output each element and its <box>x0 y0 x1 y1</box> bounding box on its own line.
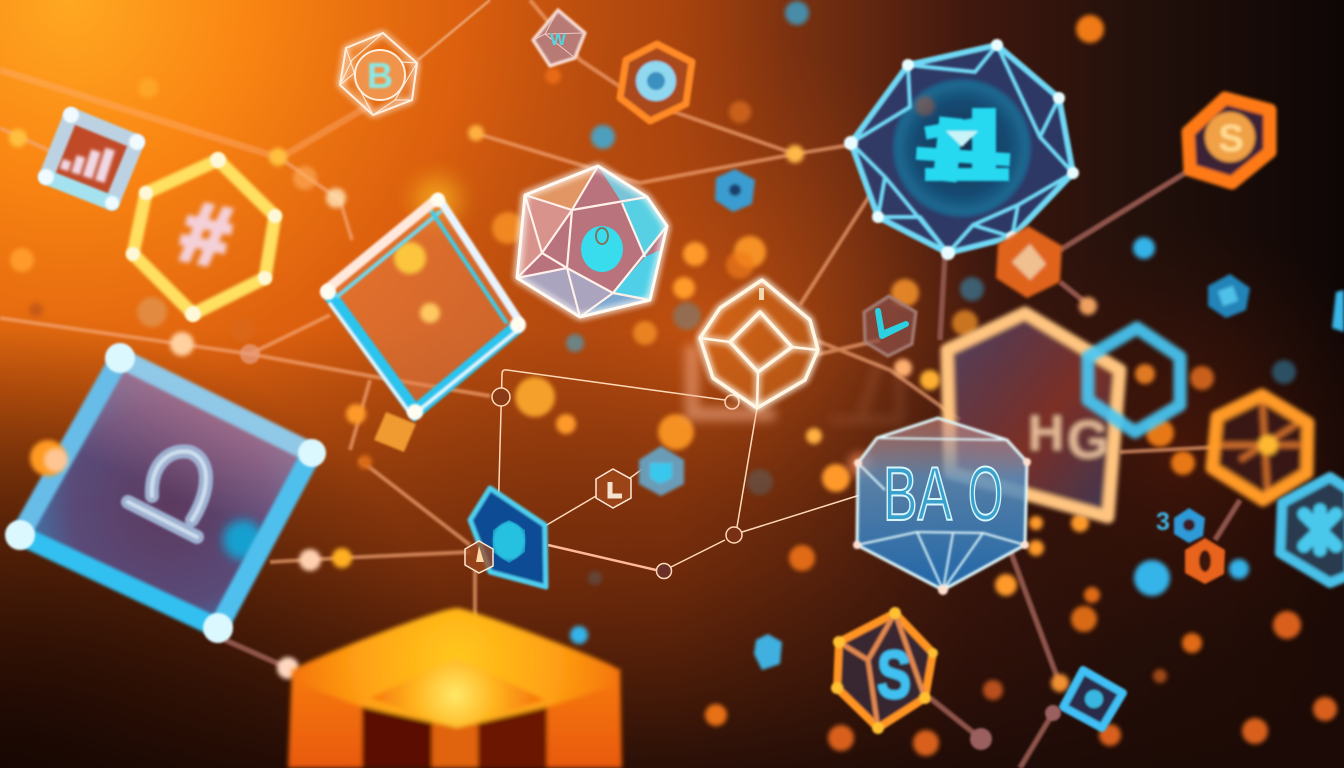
icon: orange hexagon coin <box>1188 98 1270 183</box>
icon: small blue hexagons <box>715 169 1344 670</box>
icon: faceted crystal <box>517 166 667 317</box>
icon: blurred orange tile <box>374 412 416 452</box>
icon: small orange hexagon <box>996 226 1062 298</box>
icon: crystal labelled BAO <box>848 418 1031 595</box>
icon: small outlined hexagon <box>596 469 631 508</box>
icon: orange hexagon coin: S <box>1218 118 1244 160</box>
icon: glass diamond <box>320 178 526 420</box>
thin circuit lines <box>492 370 860 578</box>
icon: white and orange octagon <box>700 280 818 408</box>
icon: orange hexagon right <box>1210 395 1308 500</box>
icon: orange crystal S <box>831 607 938 734</box>
icon: blue hexagon asterisk <box>1280 477 1344 583</box>
icon: blurred house frame: G <box>1067 410 1109 470</box>
icon: glowing orange block <box>288 608 622 768</box>
icon: orange crystal S: S <box>877 637 911 713</box>
icon: small crystal W <box>533 10 585 66</box>
icon: blurred house frame: H <box>1028 405 1064 461</box>
icon: orange hexagon with blue circle <box>620 44 692 121</box>
icon: small blue square <box>1063 670 1123 728</box>
icon: large blue crystal with symbol <box>844 39 1079 260</box>
icon: signal bars card <box>38 107 145 210</box>
icon: blue hexagon centre <box>639 446 684 496</box>
blue bokeh particles <box>566 1 1296 644</box>
icon: blurred blue hexagon <box>1088 328 1180 432</box>
cluster: number three and small hexagons <box>1156 508 1225 584</box>
icon: crystal labelled BAO: BA <box>883 452 952 537</box>
cluster: number three and small hexagons: 3 <box>1156 508 1170 536</box>
icon: blue pentagon node <box>465 488 546 587</box>
icon: small crystal W: W <box>550 30 567 49</box>
icon: blurred house frame <box>947 313 1120 517</box>
icon: small crystal B <box>340 33 417 115</box>
icon: yellow hexagon hash: # <box>174 183 239 285</box>
icon: large blue block with symbol <box>5 343 326 643</box>
icon: dark hexagon with check <box>864 296 916 356</box>
junction nodes <box>240 344 1061 750</box>
icon: crystal labelled BAO: O <box>968 452 1003 537</box>
icon: yellow hexagon hash <box>126 152 282 322</box>
icon: small crystal B: B <box>367 55 393 96</box>
faint blurred frames behind octagon <box>692 345 900 420</box>
